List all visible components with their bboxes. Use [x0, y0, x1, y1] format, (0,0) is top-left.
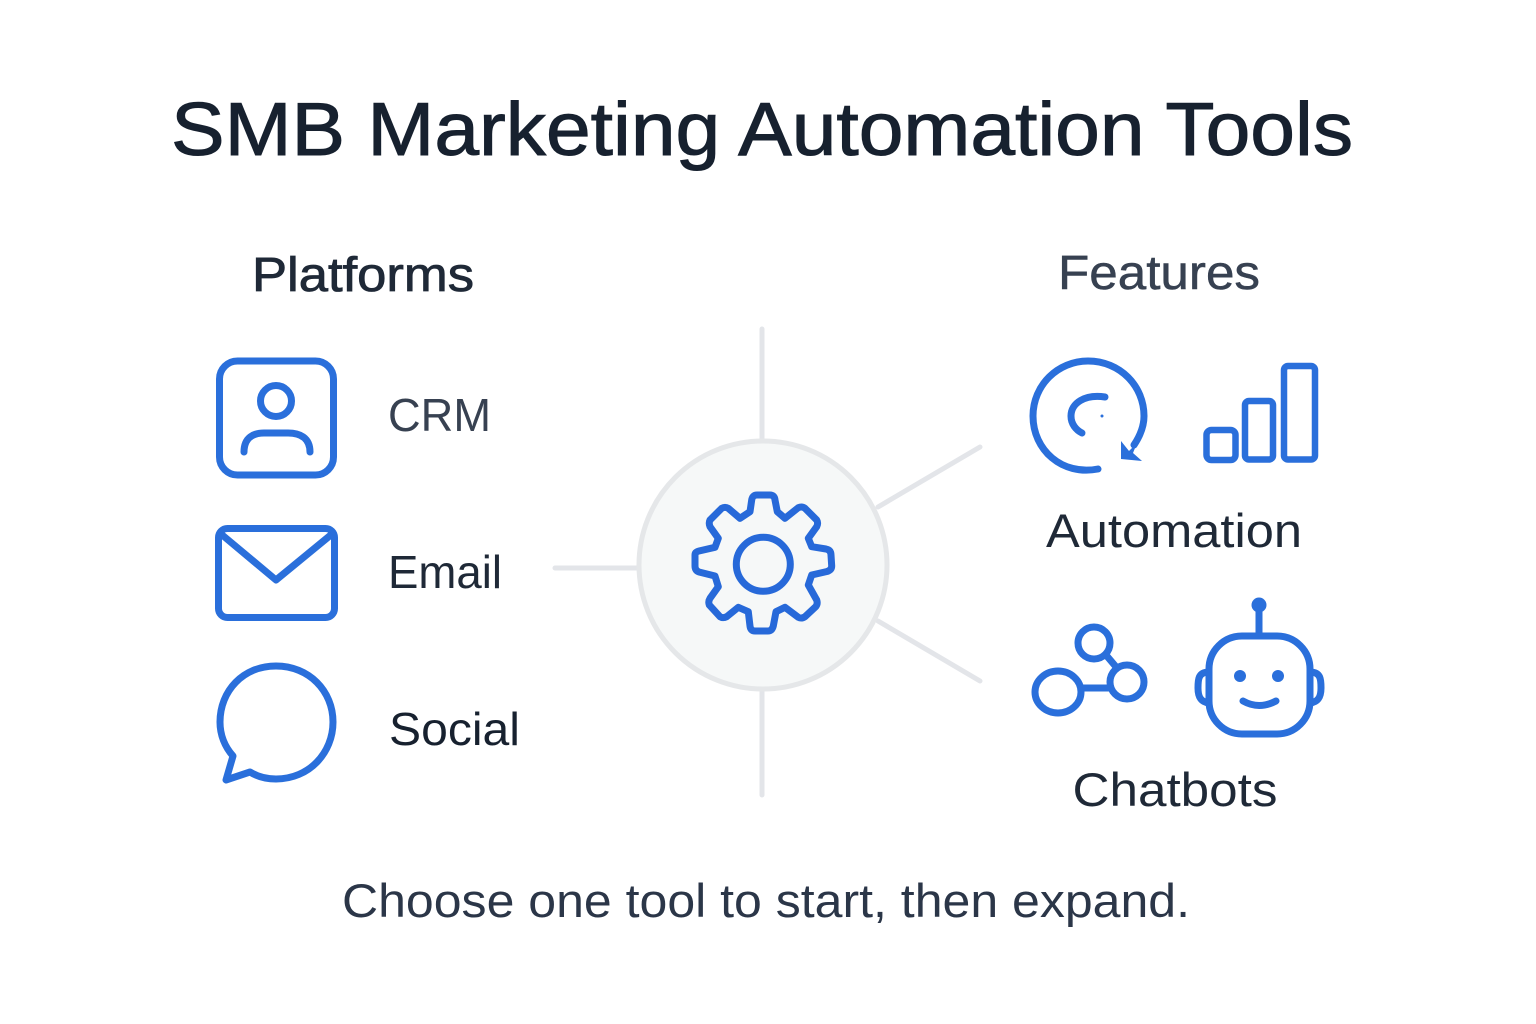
central hub with gear icon	[639, 441, 887, 689]
label: Social: Social	[389, 703, 520, 755]
icon: social speech bubble	[220, 666, 333, 780]
heading: Platforms: Platforms	[252, 249, 474, 302]
connector lines	[555, 329, 980, 795]
title: SMB Marketing Automation Tools	[171, 87, 1353, 171]
icon: gear	[695, 495, 832, 631]
icon: network nodes	[1035, 627, 1144, 713]
icon: email envelope	[218, 528, 334, 618]
label: CRM: CRM	[388, 389, 491, 441]
label: Email: Email	[388, 546, 502, 598]
footer tagline: Choose one tool to start, then expand.	[342, 874, 1190, 927]
icon: automation cycle	[1033, 361, 1144, 470]
icon: bar chart	[1206, 366, 1315, 460]
icon: chatbot robot	[1198, 598, 1321, 734]
heading: Features: Features	[1058, 247, 1260, 300]
icon: CRM contact card	[220, 361, 334, 475]
label: Chatbots: Chatbots	[1072, 763, 1278, 816]
label: Automation: Automation	[1046, 504, 1302, 557]
